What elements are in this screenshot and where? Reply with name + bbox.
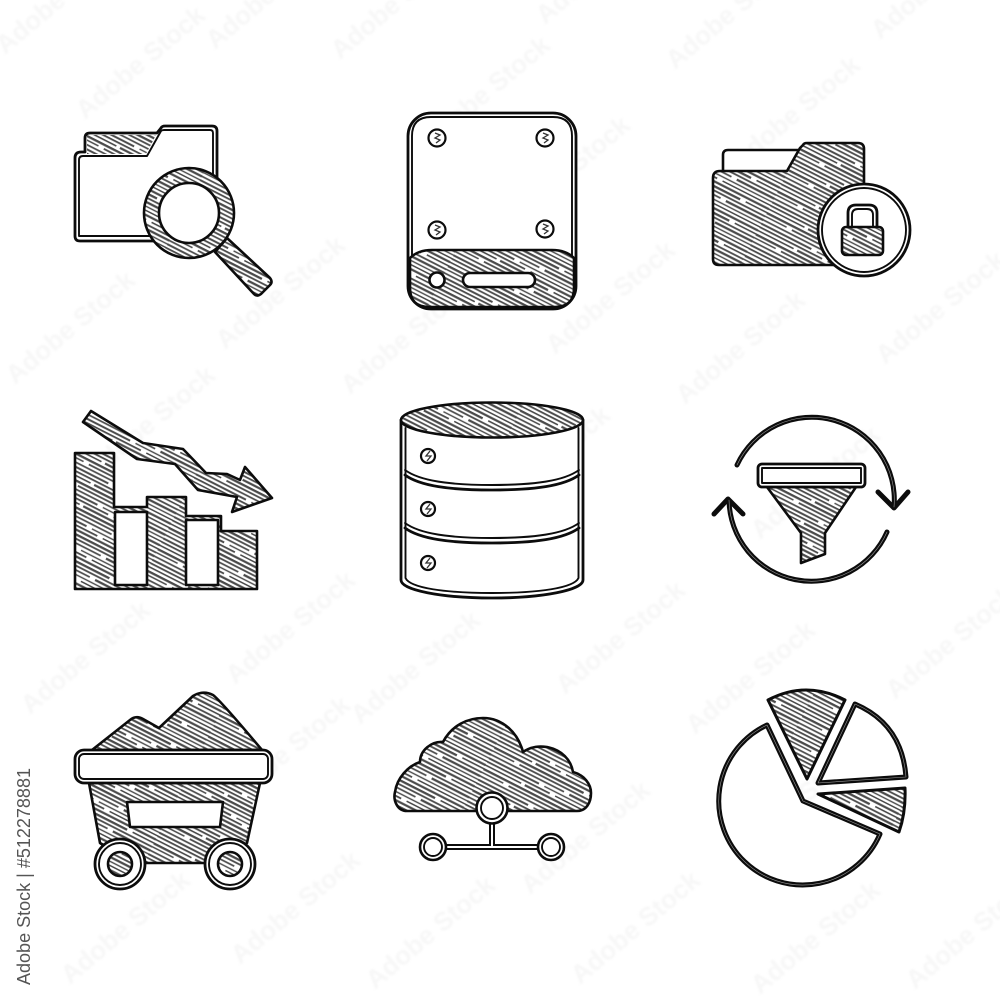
watermarks: Adobe Stock <box>565 864 706 990</box>
watermarks: Adobe Stock <box>475 399 616 525</box>
left wheel <box>95 839 145 889</box>
watermarks: Adobe Stock <box>495 109 636 235</box>
icon: folder search <box>75 126 272 296</box>
cart body <box>89 783 260 863</box>
magnifier handle <box>215 238 272 296</box>
watermarks: Adobe Stock <box>745 419 886 545</box>
lower arc arrow <box>714 499 887 581</box>
watermarks: Adobe Stock <box>215 689 356 815</box>
drive inner line <box>412 117 572 258</box>
inner sides <box>406 428 578 593</box>
back tab <box>723 150 800 172</box>
watermarks: Adobe Stock <box>15 594 156 720</box>
watermarks: Adobe Stock <box>55 864 196 990</box>
icon: locked folder <box>713 143 910 276</box>
ore pile <box>92 693 262 750</box>
hatched top slice <box>768 690 845 779</box>
white gaps <box>115 512 147 585</box>
folder body hatch <box>713 143 864 265</box>
watermarks: Adobe Stock <box>220 564 361 690</box>
large pie slice <box>719 725 880 885</box>
icon: pie chart <box>719 690 906 885</box>
falling arrow <box>83 411 272 512</box>
divider one <box>405 475 579 490</box>
watermarks: Adobe Stock <box>70 0 211 125</box>
drive body <box>408 113 576 309</box>
watermarks: Adobe Stock <box>0 264 141 390</box>
upper arc arrow <box>737 417 908 508</box>
watermarks: Adobe Stock <box>725 49 866 175</box>
funnel cone <box>767 487 856 563</box>
lock circle <box>818 184 910 276</box>
funnel rim <box>758 464 865 487</box>
divider two <box>405 528 579 543</box>
watermarks: Adobe Stock <box>345 604 486 730</box>
top ellipse <box>401 402 583 438</box>
icon: cloud network <box>394 718 591 860</box>
cloud <box>394 718 591 811</box>
bars <box>75 453 257 589</box>
led <box>430 272 444 288</box>
cart window <box>127 802 223 827</box>
lock body <box>842 227 883 255</box>
top node <box>476 792 508 824</box>
watermarks: Adobe Stock <box>335 274 476 400</box>
body outline <box>401 420 583 598</box>
folder tab hatch <box>87 135 156 154</box>
watermarks: Adobe Stock <box>725 739 866 865</box>
watermarks: Adobe Stock <box>415 29 556 155</box>
stock id side text: Adobe Stock | #512278881 <box>13 768 34 985</box>
watermarks: Adobe Stock <box>515 774 656 900</box>
icon: funnel with cycle arrows <box>714 417 908 581</box>
icon: mine cart <box>75 693 272 889</box>
folder outline <box>75 126 217 241</box>
screws <box>428 130 554 238</box>
watermarks: Adobe Stock <box>80 359 221 485</box>
icon: database <box>401 402 583 598</box>
left node <box>420 834 446 860</box>
watermarks: Adobe Stock <box>680 614 821 740</box>
slot <box>463 273 535 287</box>
watermarks: Adobe Stock <box>550 574 691 700</box>
right wheel <box>205 839 255 889</box>
icon: hard drive <box>408 113 576 309</box>
watermarks: Adobe Stock <box>670 284 811 410</box>
magnifier ring <box>144 168 234 258</box>
watermarks: Adobe Stock <box>210 229 351 355</box>
hatched lower slice <box>818 788 905 832</box>
magnifier lens <box>159 183 219 243</box>
watermarks: Adobe Stock <box>745 874 886 1000</box>
cart rim <box>75 750 272 783</box>
icon: falling bar chart <box>75 411 272 589</box>
network stem <box>445 820 540 849</box>
watermarks: Adobe Stock <box>360 869 501 995</box>
drive lower hatched section <box>410 250 574 307</box>
white right slice <box>818 704 906 783</box>
indicator lights <box>421 449 435 570</box>
lock shackle <box>848 205 877 227</box>
watermarks: Adobe Stock <box>225 844 366 970</box>
folder inner line <box>79 130 213 236</box>
right node <box>538 834 564 860</box>
watermarks: Adobe Stock <box>540 234 681 360</box>
